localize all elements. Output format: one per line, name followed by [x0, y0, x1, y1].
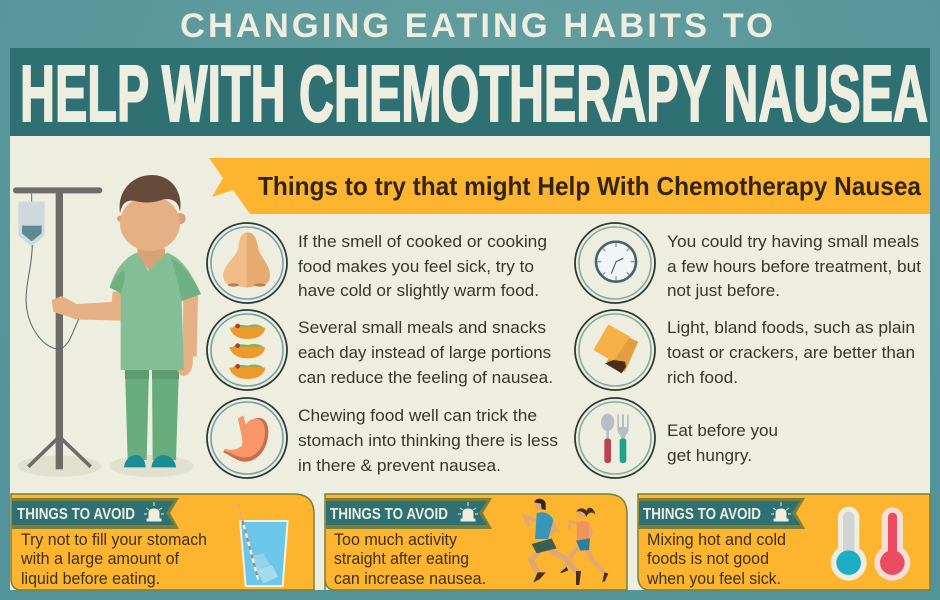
- tip: stomach: [207, 398, 287, 478]
- text: eat before: [667, 421, 778, 465]
- text: chewing: Chewing food well can trick the: [298, 406, 537, 425]
- text: with a large amount of: [20, 550, 179, 568]
- text: smell: have cold or slightly warm food.: [298, 281, 539, 300]
- text: liquid before eating.: [21, 570, 160, 588]
- text: smell: If the smell of cooked or cooking: [298, 232, 547, 251]
- shirt: [110, 253, 201, 370]
- text: Too much activity: [334, 531, 458, 549]
- text: bland foods: [667, 318, 915, 387]
- text: foods is not good: [647, 550, 769, 568]
- illustration: patient: [52, 175, 201, 477]
- text: several meals: each day instead of large portions: [298, 343, 551, 362]
- text: chewing: stomach into thinking there is less: [298, 431, 558, 450]
- hair: [120, 175, 181, 213]
- arms: [52, 292, 121, 321]
- text: eat before: Eat before you: [667, 421, 778, 440]
- text: before treatment: [667, 232, 921, 300]
- card: avoid mixing temperatures: [638, 494, 930, 590]
- content panel: [10, 136, 930, 590]
- text: smell: food makes you feel sick, try to: [298, 257, 534, 276]
- tip: clock: [575, 223, 655, 303]
- text: chewing: in there & prevent nausea.: [298, 456, 501, 475]
- text: before treatment: You could try having small meals: [667, 232, 919, 251]
- ears: [174, 213, 186, 224]
- tip: cutlery: [575, 398, 655, 478]
- icon: runners: [525, 499, 608, 585]
- tip: crackers: [575, 310, 655, 390]
- text: Mixing hot and cold: [647, 531, 786, 549]
- icon: hot thermometer: [874, 507, 910, 581]
- text: several meals: [298, 318, 553, 387]
- ribbon: [326, 498, 492, 529]
- text: chewing: [298, 406, 558, 475]
- trousers: [125, 368, 149, 460]
- section heading banner: [209, 158, 930, 214]
- title line 1: CHANGING EATING HABITS TO: [180, 7, 773, 45]
- ribbon: [12, 498, 179, 529]
- shoes: [124, 455, 146, 467]
- text: several meals: can reduce the feeling of nausea.: [298, 368, 553, 387]
- text: before treatment: a few hours before treatment, but: [667, 257, 921, 276]
- icon: cold thermometer: [831, 507, 867, 581]
- neck: [137, 248, 165, 272]
- text: several meals: Several small meals and snacks: [298, 318, 546, 337]
- illustration: IV stand: [13, 187, 102, 477]
- face: [120, 196, 180, 251]
- card: avoid liquid: [11, 494, 314, 590]
- text: can increase nausea.: [334, 570, 486, 588]
- text: Try not to fill your stomach: [21, 531, 207, 549]
- tip: small meals: [207, 310, 287, 390]
- text: [334, 531, 486, 588]
- text: smell: [298, 232, 547, 300]
- ribbon: THINGS TO AVOID: [17, 506, 135, 523]
- tip: nose: [207, 223, 287, 303]
- text: bland foods: rich food.: [667, 368, 738, 387]
- text: [646, 531, 786, 588]
- text: eat before: get hungry.: [667, 446, 752, 465]
- title band: [10, 48, 930, 136]
- text: before treatment: not just before.: [667, 281, 780, 300]
- text: [20, 531, 207, 588]
- ribbon: THINGS TO AVOID: [330, 506, 448, 523]
- title: [10, 7, 930, 138]
- text: when you feel sick.: [646, 570, 781, 588]
- text: straight after eating: [334, 550, 469, 568]
- card: avoid activity: [325, 494, 627, 590]
- icon: glass of water: [238, 504, 288, 586]
- text: bland foods: toast or crackers, are better than: [667, 343, 915, 362]
- text: bland foods: Light, bland foods, such as plain: [667, 318, 915, 337]
- ribbon: THINGS TO AVOID: [643, 506, 761, 523]
- ribbon: [639, 498, 805, 529]
